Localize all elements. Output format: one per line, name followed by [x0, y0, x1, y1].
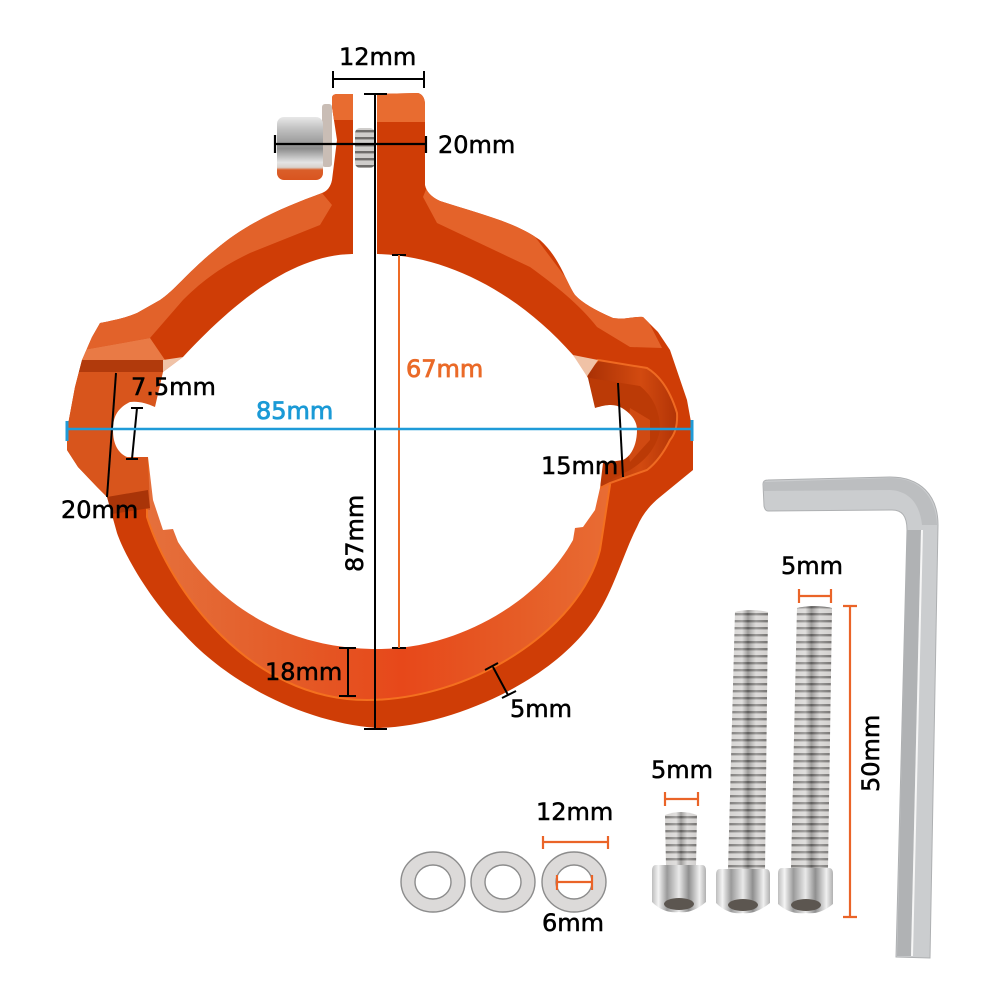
upper right light face [423, 187, 662, 348]
head [716, 869, 770, 913]
thread [728, 610, 768, 870]
ring shaded faces [62, 92, 677, 700]
dimension labels: 20mm [61, 496, 138, 524]
left block face [62, 372, 165, 510]
washer 1 [401, 852, 465, 912]
hardware labels: 5mm [651, 756, 713, 784]
left top dark strip [76, 360, 165, 372]
ring silhouette [67, 93, 693, 728]
tab top highlights [332, 92, 427, 122]
dimension labels [61, 43, 618, 723]
socket [664, 898, 694, 910]
clamp ring [62, 92, 693, 728]
head [778, 868, 833, 913]
head [652, 865, 706, 912]
blue 85mm line [67, 428, 692, 430]
orange 67mm line [398, 255, 400, 648]
right pocket inner step [590, 378, 660, 480]
key highlight [912, 530, 922, 956]
dimension labels: 18mm [265, 658, 342, 686]
dimension labels: 67mm [406, 355, 483, 383]
washers [401, 852, 606, 912]
orange hardware dimension lines [543, 589, 857, 917]
socket [791, 899, 821, 911]
dimension labels: 20mm [438, 131, 515, 159]
long bolt 2 [778, 606, 833, 913]
thread [665, 812, 697, 866]
hardware labels: 5mm [781, 552, 843, 580]
dimension labels: 5mm [510, 695, 572, 723]
dimension labels: 85mm [256, 397, 333, 425]
right pocket [586, 360, 677, 488]
infographic canvas [62, 47, 938, 958]
dimension labels: 12mm [339, 43, 416, 71]
dimension labels: 7.5mm [131, 373, 216, 401]
right chamfer tint [573, 355, 598, 378]
central opening [113, 254, 637, 649]
hardware labels: 50mm [857, 715, 885, 792]
blue 85mm end ticks [67, 420, 692, 441]
lit lower inner wall [146, 458, 611, 701]
hardware labels [536, 552, 885, 937]
hex key [763, 477, 938, 958]
hardware labels: 6mm [542, 909, 604, 937]
right pocket centre glow [629, 408, 650, 462]
threaded bolt end [355, 128, 375, 168]
left chamfer [80, 338, 165, 360]
long bolt 1 [716, 610, 770, 913]
dimension lines [107, 71, 623, 729]
key body [763, 477, 938, 958]
left chamfer tint [163, 357, 183, 372]
key upper facet [764, 478, 937, 525]
dimension labels: 15mm [541, 452, 618, 480]
washer 2 [471, 852, 535, 912]
key lower vertical facet [897, 530, 921, 956]
washer behind bolt head [322, 104, 332, 167]
thread [791, 606, 832, 868]
left block lower strip [107, 490, 150, 514]
short bolt [652, 812, 706, 912]
washer 3 [542, 852, 606, 912]
hardware labels: 12mm [536, 798, 613, 826]
upper left light face [83, 193, 332, 350]
socket [728, 899, 758, 911]
bolt head [277, 117, 323, 180]
dimension labels: 87mm [341, 495, 369, 572]
